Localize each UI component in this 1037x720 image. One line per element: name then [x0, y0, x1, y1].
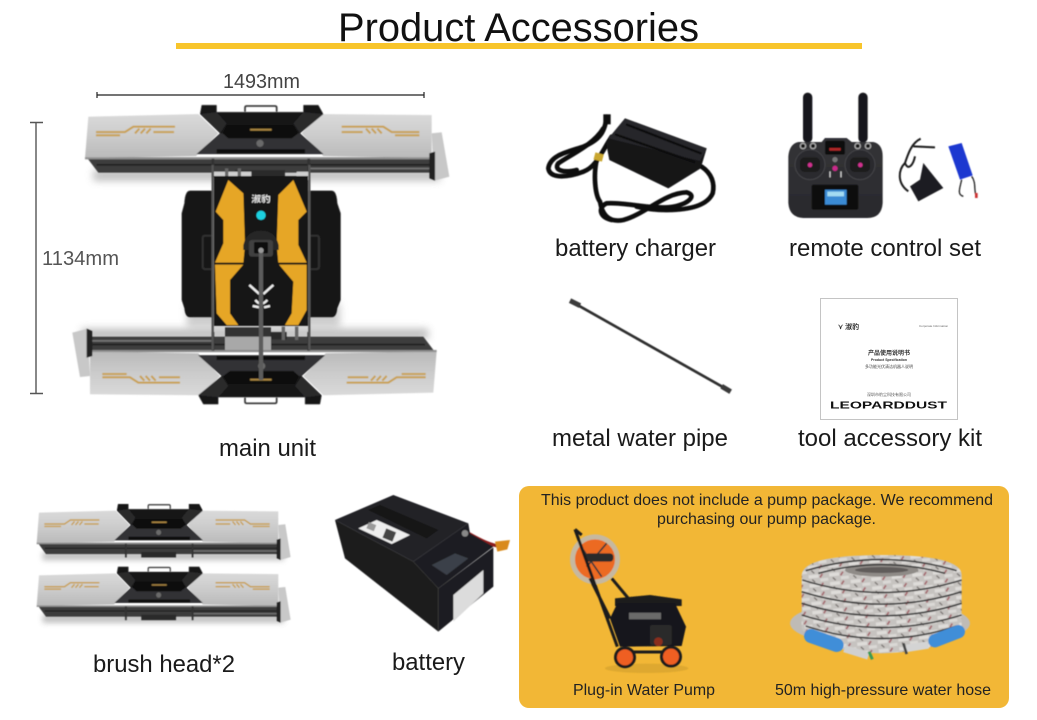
tool accessory kit manual: 深圳市豹尘科技有限公司: [867, 391, 911, 397]
height dimension: 1134mm: [42, 248, 119, 270]
battery charger illustration: [548, 114, 713, 221]
tool accessory kit manual: [820, 298, 958, 420]
main unit label: main unit: [219, 435, 316, 462]
battery charger label: battery charger: [555, 235, 716, 262]
status light: [256, 211, 266, 220]
pipe: [254, 250, 267, 380]
tool accessory kit manual: Corporate Information: [919, 324, 949, 328]
height dimension: [30, 122, 119, 394]
width dimension: [97, 71, 424, 98]
tool accessory kit manual: LEOPARDDUST: [830, 400, 948, 412]
water pump label: Plug-in Water Pump: [573, 682, 715, 699]
water pump illustration: [570, 529, 688, 673]
title: Product Accessories: [338, 6, 699, 50]
brush head pair illustration: [37, 504, 291, 623]
machine drawing: [72, 105, 449, 404]
metal water pipe label: metal water pipe: [552, 425, 728, 452]
tool accessory kit manual: 多功能光伏清洁机器人说明: [865, 363, 913, 369]
main unit illustration: [30, 71, 449, 404]
yellow panels: [215, 180, 307, 325]
left track: [182, 191, 213, 317]
remote control set label: remote control set: [789, 235, 981, 262]
pump notice text: This product does not include a pump package. We recommend: [541, 492, 993, 509]
hose label: 50m high-pressure water hose: [775, 682, 991, 699]
tool accessory kit manual: ⋎ 淑豹: [837, 322, 859, 331]
width dimension: 1493mm: [223, 71, 300, 93]
logo text: 淑豹: [251, 193, 271, 204]
metal water pipe illustration: [570, 301, 731, 392]
right track: [308, 191, 341, 317]
title underline: [176, 43, 862, 49]
pump notice text: purchasing our pump package.: [657, 511, 876, 528]
frame: [213, 165, 309, 350]
tool accessory kit label: tool accessory kit: [798, 425, 982, 452]
panel: pump package: [519, 486, 1009, 708]
body: [214, 176, 308, 326]
battery illustration: [335, 495, 510, 632]
bottom brush head: [72, 329, 437, 404]
bunny mark: [249, 285, 273, 307]
brush head label: brush head*2: [93, 651, 235, 678]
remote control set illustration: [788, 93, 978, 218]
battery label: battery: [392, 649, 465, 676]
top brush head: [85, 105, 449, 181]
tool accessory kit manual: Product Specification: [871, 358, 907, 362]
tool accessory kit manual: 产品使用说明书: [868, 349, 910, 357]
hose illustration: [790, 555, 970, 659]
pump notice text: [541, 492, 993, 528]
